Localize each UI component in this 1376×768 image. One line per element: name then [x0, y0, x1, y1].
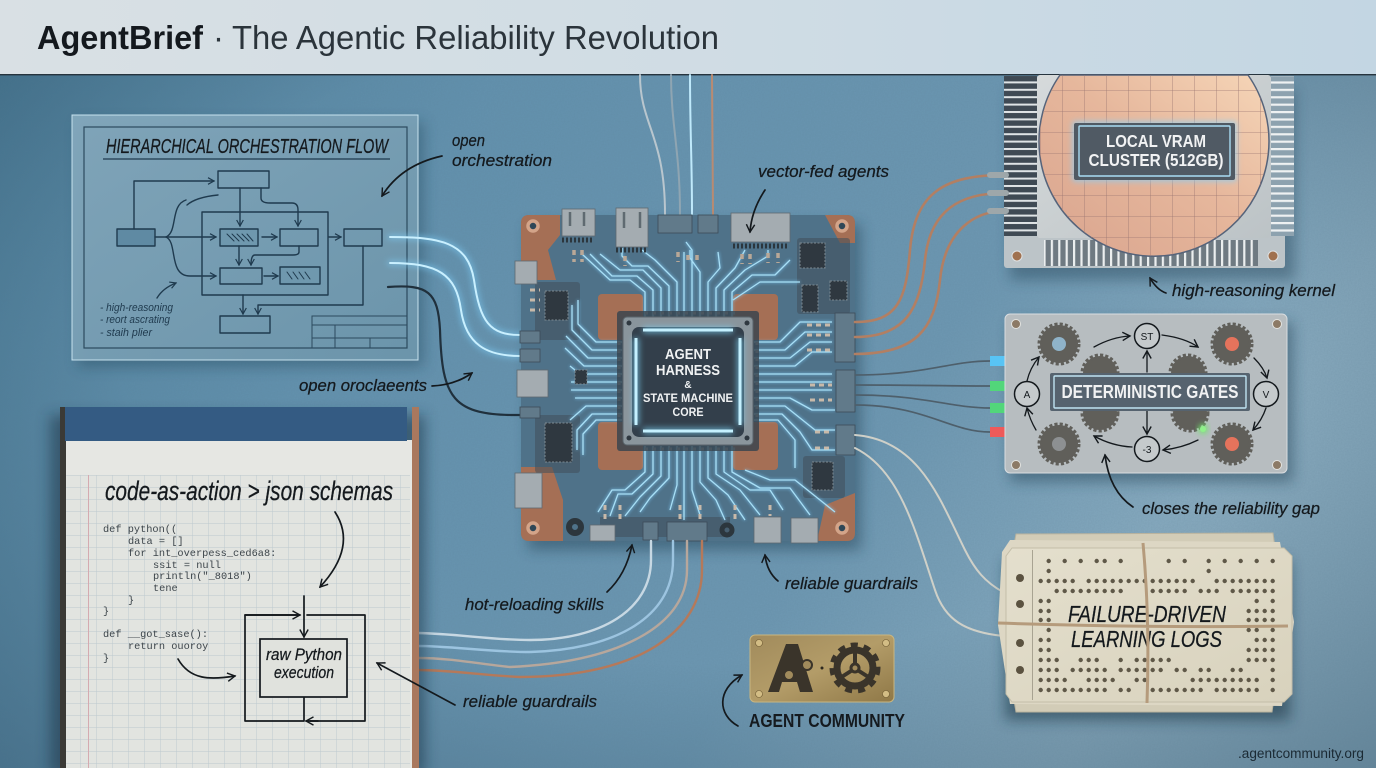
- code listing: tene: [153, 583, 178, 595]
- annotation: open orchestration: open: [452, 131, 485, 150]
- blueprint notes: - high-reasoning: [100, 302, 174, 314]
- blueprint heading: HIERARCHICAL ORCHESTRATION FLOW: [106, 136, 390, 158]
- annotation: open oroclaeents: open oroclaeents: [299, 376, 427, 395]
- logs label: [1068, 601, 1226, 652]
- header bar: [0, 0, 1376, 75]
- raw Python execution loop: [245, 596, 365, 721]
- code listing: }: [128, 595, 134, 607]
- central chip: [617, 311, 759, 451]
- chip label: [643, 347, 733, 419]
- blueprint notes: - staih plier: [100, 327, 153, 339]
- state nodes: A: [1024, 390, 1031, 401]
- small components: [530, 250, 832, 535]
- logs label: LEARNING LOGS: [1071, 626, 1223, 652]
- state arrows: [1027, 335, 1267, 450]
- blueprint notes: - reort ascrating: [100, 314, 171, 326]
- wires: board to notepad: [418, 541, 702, 677]
- community label: AGENT COMMUNITY: [749, 711, 905, 731]
- arrow: heading to loop: [320, 512, 343, 587]
- wafer: [1039, 75, 1269, 256]
- code listing: }: [103, 606, 109, 618]
- annotation: reliable guardrails left: reliable guardrails: [463, 692, 597, 711]
- copper zones: [521, 215, 855, 541]
- twine: [998, 543, 1288, 703]
- annotation: closes the reliability gap: closes the reliability gap: [1142, 499, 1320, 518]
- arrow: code to loop: [178, 659, 235, 678]
- panel: deterministic gates: [990, 314, 1293, 482]
- wires: board to failure logs: [855, 435, 1003, 636]
- dark component areas: [535, 238, 850, 537]
- state nodes: [1014, 324, 1278, 462]
- annotation: closes the reliability gap: [1105, 455, 1320, 518]
- panel: local VRAM cluster: [990, 75, 1295, 280]
- state nodes: V: [1263, 390, 1270, 401]
- punch holes: [1041, 561, 1273, 690]
- panel: glass orchestration blueprint: [72, 115, 424, 367]
- annotation: reliable guardrails left: [377, 663, 597, 711]
- status LEDs: [990, 356, 1005, 437]
- wires: board to gate LEDs: [855, 361, 990, 432]
- code listing: def python((: [103, 524, 177, 536]
- wires: top feed into board: [640, 75, 713, 214]
- gates label: [1050, 373, 1250, 411]
- brass badge: [750, 635, 894, 702]
- pipes: [990, 175, 1006, 211]
- circuit traces: [565, 242, 835, 520]
- panel: PCB core board: [515, 208, 861, 550]
- code listing: for int_overpess_ced6a8:: [128, 548, 276, 560]
- title block: [312, 316, 407, 348]
- wires: glowing links from blueprint to board: [388, 237, 520, 415]
- state nodes: ST: [1141, 332, 1153, 343]
- VRAM label: CLUSTER (512GB): [1088, 150, 1224, 170]
- annotation: hot-reloading skills: hot-reloading skills: [465, 595, 604, 614]
- wires: copper links from board to VRAM: [855, 175, 1005, 354]
- annotation: open oroclaeents: [299, 373, 472, 395]
- icon: letter A with cogs: [768, 644, 813, 692]
- flow diagram: [117, 171, 382, 333]
- panel: failure-driven learning logs: [998, 533, 1294, 720]
- annotation: vector-fed agents: vector-fed agents: [758, 162, 889, 181]
- chip label: AGENT: [665, 347, 711, 363]
- panel: notepad with code: [50, 407, 425, 768]
- gates label: DETERMINISTIC GATES: [1062, 382, 1238, 402]
- VRAM label: LOCAL VRAM: [1106, 131, 1206, 151]
- arrow: badge annotation: [723, 675, 742, 726]
- notepad heading: code-as-action > json schemas: [105, 476, 393, 506]
- title: The Agentic Reliability Revolution: [232, 19, 719, 56]
- code listing: return ouoroy: [128, 641, 208, 653]
- code listing: data = []: [128, 536, 184, 548]
- annotation: open orchestration: [382, 131, 552, 196]
- code listing: println("_8018"): [153, 571, 252, 583]
- state nodes: -3: [1143, 445, 1152, 456]
- title: ·: [213, 19, 224, 56]
- IC chips: [545, 243, 847, 490]
- annotation: reliable guardrails right: reliable guardrails: [785, 574, 918, 593]
- annotation: high-reasoning kernel: high-reasoning kernel: [1172, 281, 1336, 300]
- VRAM label: [1072, 121, 1237, 182]
- annotation: vector-fed agents: [750, 162, 889, 232]
- code listing: def __got_sase():: [103, 629, 208, 641]
- logs label: FAILURE-DRIVEN: [1068, 601, 1226, 627]
- icon: gear: [832, 645, 878, 691]
- annotation: hot-reloading skills: [465, 545, 632, 614]
- code listing: ssit = null: [153, 560, 221, 572]
- title: AgentBrief: [37, 19, 204, 56]
- code listing: }: [103, 653, 109, 665]
- blueprint notes: [100, 283, 176, 339]
- chip label: CORE: [672, 405, 704, 419]
- annotation: open orchestration: orchestration: [452, 151, 552, 170]
- chip label: HARNESS: [656, 363, 720, 379]
- annotation: reliable guardrails right: [765, 555, 918, 593]
- connectors: [515, 208, 855, 543]
- raw Python execution loop: execution: [274, 663, 334, 682]
- mounting holes: [528, 221, 847, 533]
- pin rows around chip: [619, 313, 757, 449]
- code listing: [103, 524, 276, 665]
- gears: [1040, 325, 1251, 463]
- raw Python execution loop: raw Python: [266, 645, 342, 664]
- chip label: &: [684, 380, 692, 391]
- footer url: .agentcommunity.org: [1238, 746, 1364, 761]
- chip label: STATE MACHINE: [643, 391, 733, 405]
